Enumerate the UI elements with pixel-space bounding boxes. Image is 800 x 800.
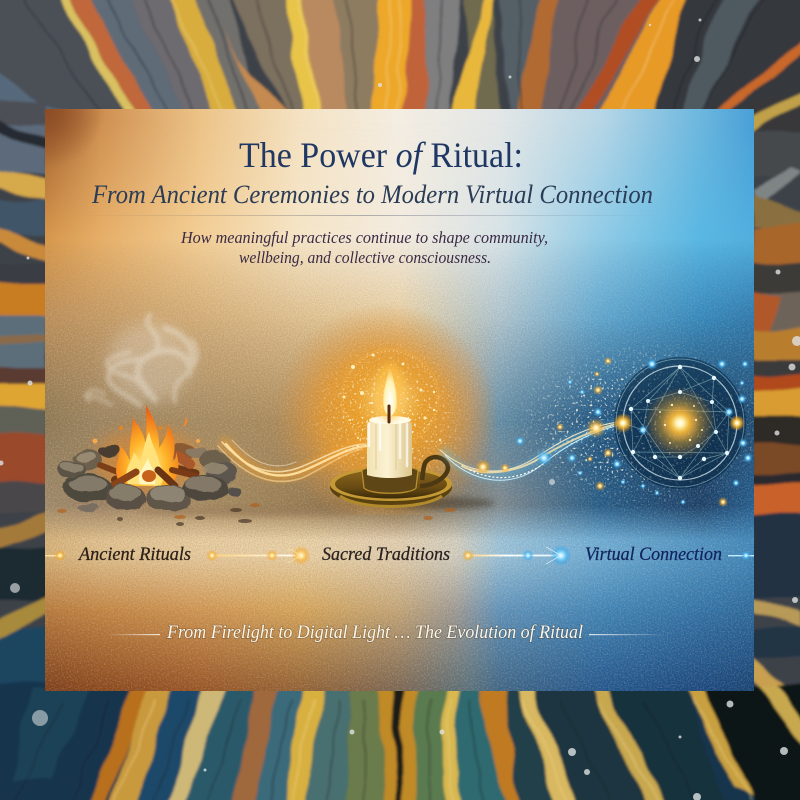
smoke haze <box>108 322 192 402</box>
title divider <box>115 215 614 216</box>
cup <box>362 466 418 493</box>
ground debris <box>57 497 495 526</box>
arrow: lead-in <box>45 550 66 561</box>
front stones <box>61 452 241 512</box>
campfire <box>58 405 241 512</box>
stage label: Sacred Traditions: Sacred Traditions <box>322 545 450 565</box>
tagline rule right <box>589 634 665 635</box>
arrow: sacred to virtual <box>462 546 571 566</box>
stage label: Virtual Connection: Virtual Connection <box>585 545 722 565</box>
handle <box>420 457 448 486</box>
main panel <box>45 109 754 691</box>
flames <box>116 405 178 486</box>
subtitle: From Ancient Ceremonies to Modern Virtual Connection <box>91 180 653 209</box>
rear stones <box>58 444 238 485</box>
wax <box>367 418 412 478</box>
wick <box>388 406 390 422</box>
stage label: Ancient Rituals: Ancient Rituals <box>77 545 191 565</box>
dust of digital sparks <box>510 340 754 510</box>
flame <box>375 363 405 421</box>
title: The Power of Ritual: <box>239 135 523 175</box>
candle on brass holder <box>330 363 452 507</box>
network nodes <box>629 365 732 480</box>
warm wave from fire to candle <box>218 440 366 481</box>
digital network sphere <box>614 357 746 489</box>
logs <box>100 456 196 480</box>
tagline: From Firelight to Digital Light … The Evolution of Ritual <box>166 622 583 643</box>
arrow: lead-out <box>728 551 754 560</box>
description: How meaningful practices continue to shape community, <box>180 228 548 247</box>
tagline rule left <box>105 634 160 635</box>
description <box>180 228 548 267</box>
digital wave from candle to network <box>440 421 625 480</box>
network links <box>623 367 737 478</box>
arrow: ancient to sacred <box>206 546 311 566</box>
smoke above campfire <box>86 315 197 405</box>
candle glow ring and sparks <box>310 340 470 476</box>
sandy grain texture <box>45 240 754 691</box>
saucer <box>330 485 452 505</box>
description: wellbeing, and collective consciousness. <box>239 248 491 267</box>
star particles <box>475 357 753 507</box>
